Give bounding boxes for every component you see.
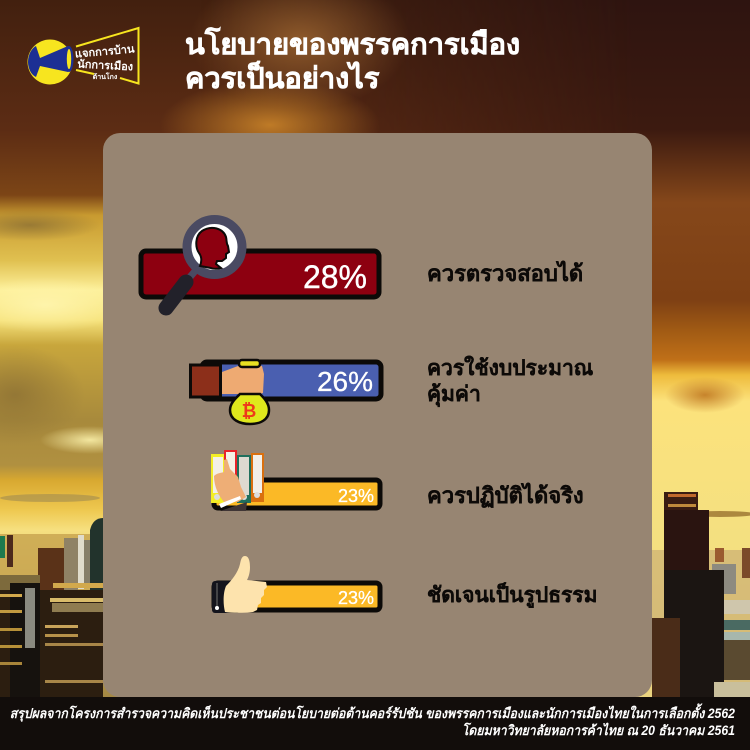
label: concrete: ชัดเจนเป็นรูปธรรม xyxy=(427,584,597,607)
bar: 23 percent concrete xyxy=(212,556,382,613)
logo text: แจกการบ้าน xyxy=(74,42,135,61)
skyline: left xyxy=(0,518,103,697)
logo text xyxy=(74,42,135,81)
icon: thumbs up xyxy=(224,556,267,613)
bar: 26 percent xyxy=(189,358,384,426)
skyline: right xyxy=(652,492,750,697)
source note xyxy=(10,703,735,738)
bar: 23 percent concrete: 23% xyxy=(338,588,374,608)
logo megaphone xyxy=(28,46,74,77)
panel: results xyxy=(103,133,652,697)
icon: binders and hand xyxy=(211,450,264,511)
icon: hand holding coin bag xyxy=(190,360,269,424)
label: cost effective: คุ้มค่า xyxy=(427,383,481,406)
bar: 23 percent practical: 23% xyxy=(338,486,374,506)
bar: 26 percent: 26% xyxy=(317,366,373,397)
logo frame xyxy=(76,28,138,84)
label: practical: ควรปฏิบัติได้จริง xyxy=(427,483,584,508)
bar: 28 percent xyxy=(138,215,382,316)
icon: magnifying glass with head xyxy=(166,220,242,308)
label: cost effective xyxy=(427,356,593,408)
footer band xyxy=(0,697,750,750)
logo text: ต้านโกง xyxy=(93,72,118,81)
clouds xyxy=(0,0,750,517)
label: cost effective: ควรใช้งบประมาณ xyxy=(427,357,593,380)
logo: megaphone badge xyxy=(28,26,140,85)
label: auditable: ควรตรวจสอบได้ xyxy=(427,261,583,286)
icon: hand holding coin bag: ₿ xyxy=(242,401,256,422)
bar: 23 percent practical xyxy=(211,450,382,511)
logo yellow circle xyxy=(28,40,72,84)
title: นโยบายของพรรคการเมือง xyxy=(185,29,520,61)
source note: สรุปผลจากโครงการสำรวจความคิดเห็นประชาชนต่อนโยบายต่อต้านคอร์รัปชัน ของพรรคการเมืองและนักการเมืองไทยในการเลือกตั้ง 2562 xyxy=(10,706,735,721)
source note: โดยมหาวิทยาลัยหอการค้าไทย ณ 20 ธันวาคม 2561 xyxy=(462,723,735,738)
title xyxy=(185,26,520,95)
bar: 28 percent: 28% xyxy=(303,259,367,295)
title: ควรเป็นอย่างไร xyxy=(185,63,379,95)
logo text: นักการเมือง xyxy=(77,58,133,73)
